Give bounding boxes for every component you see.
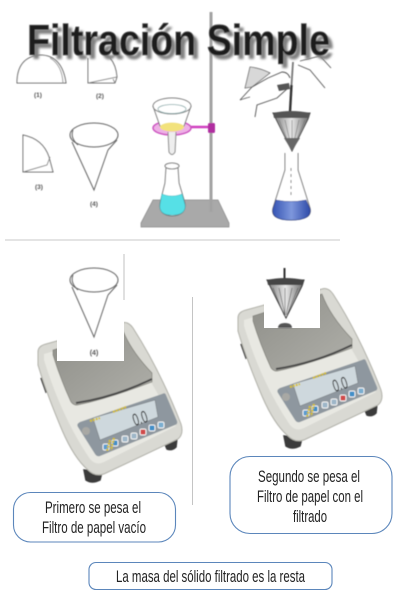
right balance [238,289,382,448]
control panel [277,359,377,422]
weighing plate [53,328,152,405]
receiving flask with blue liquid [273,153,310,220]
left balance [38,323,182,482]
balance body [238,289,382,441]
yellow marks [90,407,126,451]
vertical divider [192,297,194,505]
fold step 4: cone: (4) [90,201,98,208]
LCD display [93,400,158,440]
balance feet [41,378,177,482]
fingers gripping the rod [277,83,290,91]
fold step 4: cone [70,123,118,208]
title: Filtración Simple [31,20,334,69]
keypad [103,422,164,450]
weighing plate [253,294,352,371]
fold step 1: (1) [34,92,42,99]
keypad [303,388,364,416]
diagram: filtration stand [141,12,229,227]
beaker held in hand [245,67,270,88]
callout: first step [14,492,176,542]
empty filter cone on left balance: (4) [90,350,98,357]
stand base [141,200,229,227]
callout: result: La masa del sólido filtrado es la resta [116,568,306,586]
control panel [77,393,177,456]
callout: second step: filtrado [293,508,327,526]
power indicator [282,393,290,401]
display reading: 0.0 [130,407,150,430]
support ring and clamp [153,121,215,135]
callout: second step [230,456,392,534]
stand rod [210,12,212,212]
filter funnel [273,111,310,151]
fold step 1 [17,55,66,99]
diagram: hands pouring through filter [240,56,331,220]
horizontal divider [5,239,340,241]
diagram: paper folding steps [17,55,118,208]
callout: result [89,562,332,590]
balance body [38,323,182,475]
balance feet [241,344,377,448]
callout: first step: Primero se pesa el [45,499,141,517]
fold step 3: (3) [35,184,43,191]
callout: second step: Segundo se pesa el [258,468,360,486]
empty filter cone on left balance [57,254,124,361]
funnel [153,98,191,154]
yellow marks [290,373,326,417]
fold step 2 [88,58,117,100]
power indicator [82,427,90,435]
hands [240,56,331,117]
display reading: 0.0 [330,373,350,396]
flask with cyan liquid [160,163,185,216]
title: Filtración Simple [27,16,330,65]
fold step 3 [23,135,53,191]
LCD display [293,366,358,406]
callout: first step: Filtro de papel vacío [42,519,146,537]
filter with filtrate on right balance [264,268,320,328]
fold step 2: (2) [96,93,104,100]
glass rod [292,62,293,85]
